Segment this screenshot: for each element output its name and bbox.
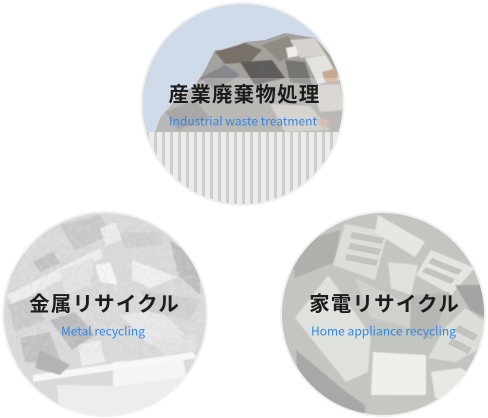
heading: industrial waste treatment: 産業廃棄物処理 bbox=[169, 78, 320, 108]
texture: small metal shards bbox=[51, 231, 104, 281]
large white sheets at the bottom bbox=[33, 350, 200, 418]
photo: scrap heap behind a corrugated wall bbox=[140, 0, 345, 208]
photo: metal scrap pieces bbox=[4, 213, 206, 404]
corrugated wall bbox=[149, 132, 338, 135]
subheading: home appliance recycling: Home appliance recycling bbox=[311, 322, 456, 340]
detail: appliance grille slats bbox=[345, 232, 478, 354]
subheading: metal recycling: Metal recycling bbox=[61, 322, 145, 340]
panel: metal recycling bbox=[0, 210, 210, 418]
panel: home appliance recycling bbox=[280, 210, 488, 418]
translucent veil over the scrap bbox=[155, 78, 345, 133]
photo: discarded appliances bbox=[280, 210, 488, 418]
heading: home appliance recycling: 家電リサイクル bbox=[309, 287, 460, 317]
panel: industrial waste treatment bbox=[140, 0, 345, 208]
subheading: industrial waste treatment: Industrial waste treatment bbox=[169, 112, 317, 130]
heading: metal recycling: 金属リサイクル bbox=[29, 287, 180, 317]
